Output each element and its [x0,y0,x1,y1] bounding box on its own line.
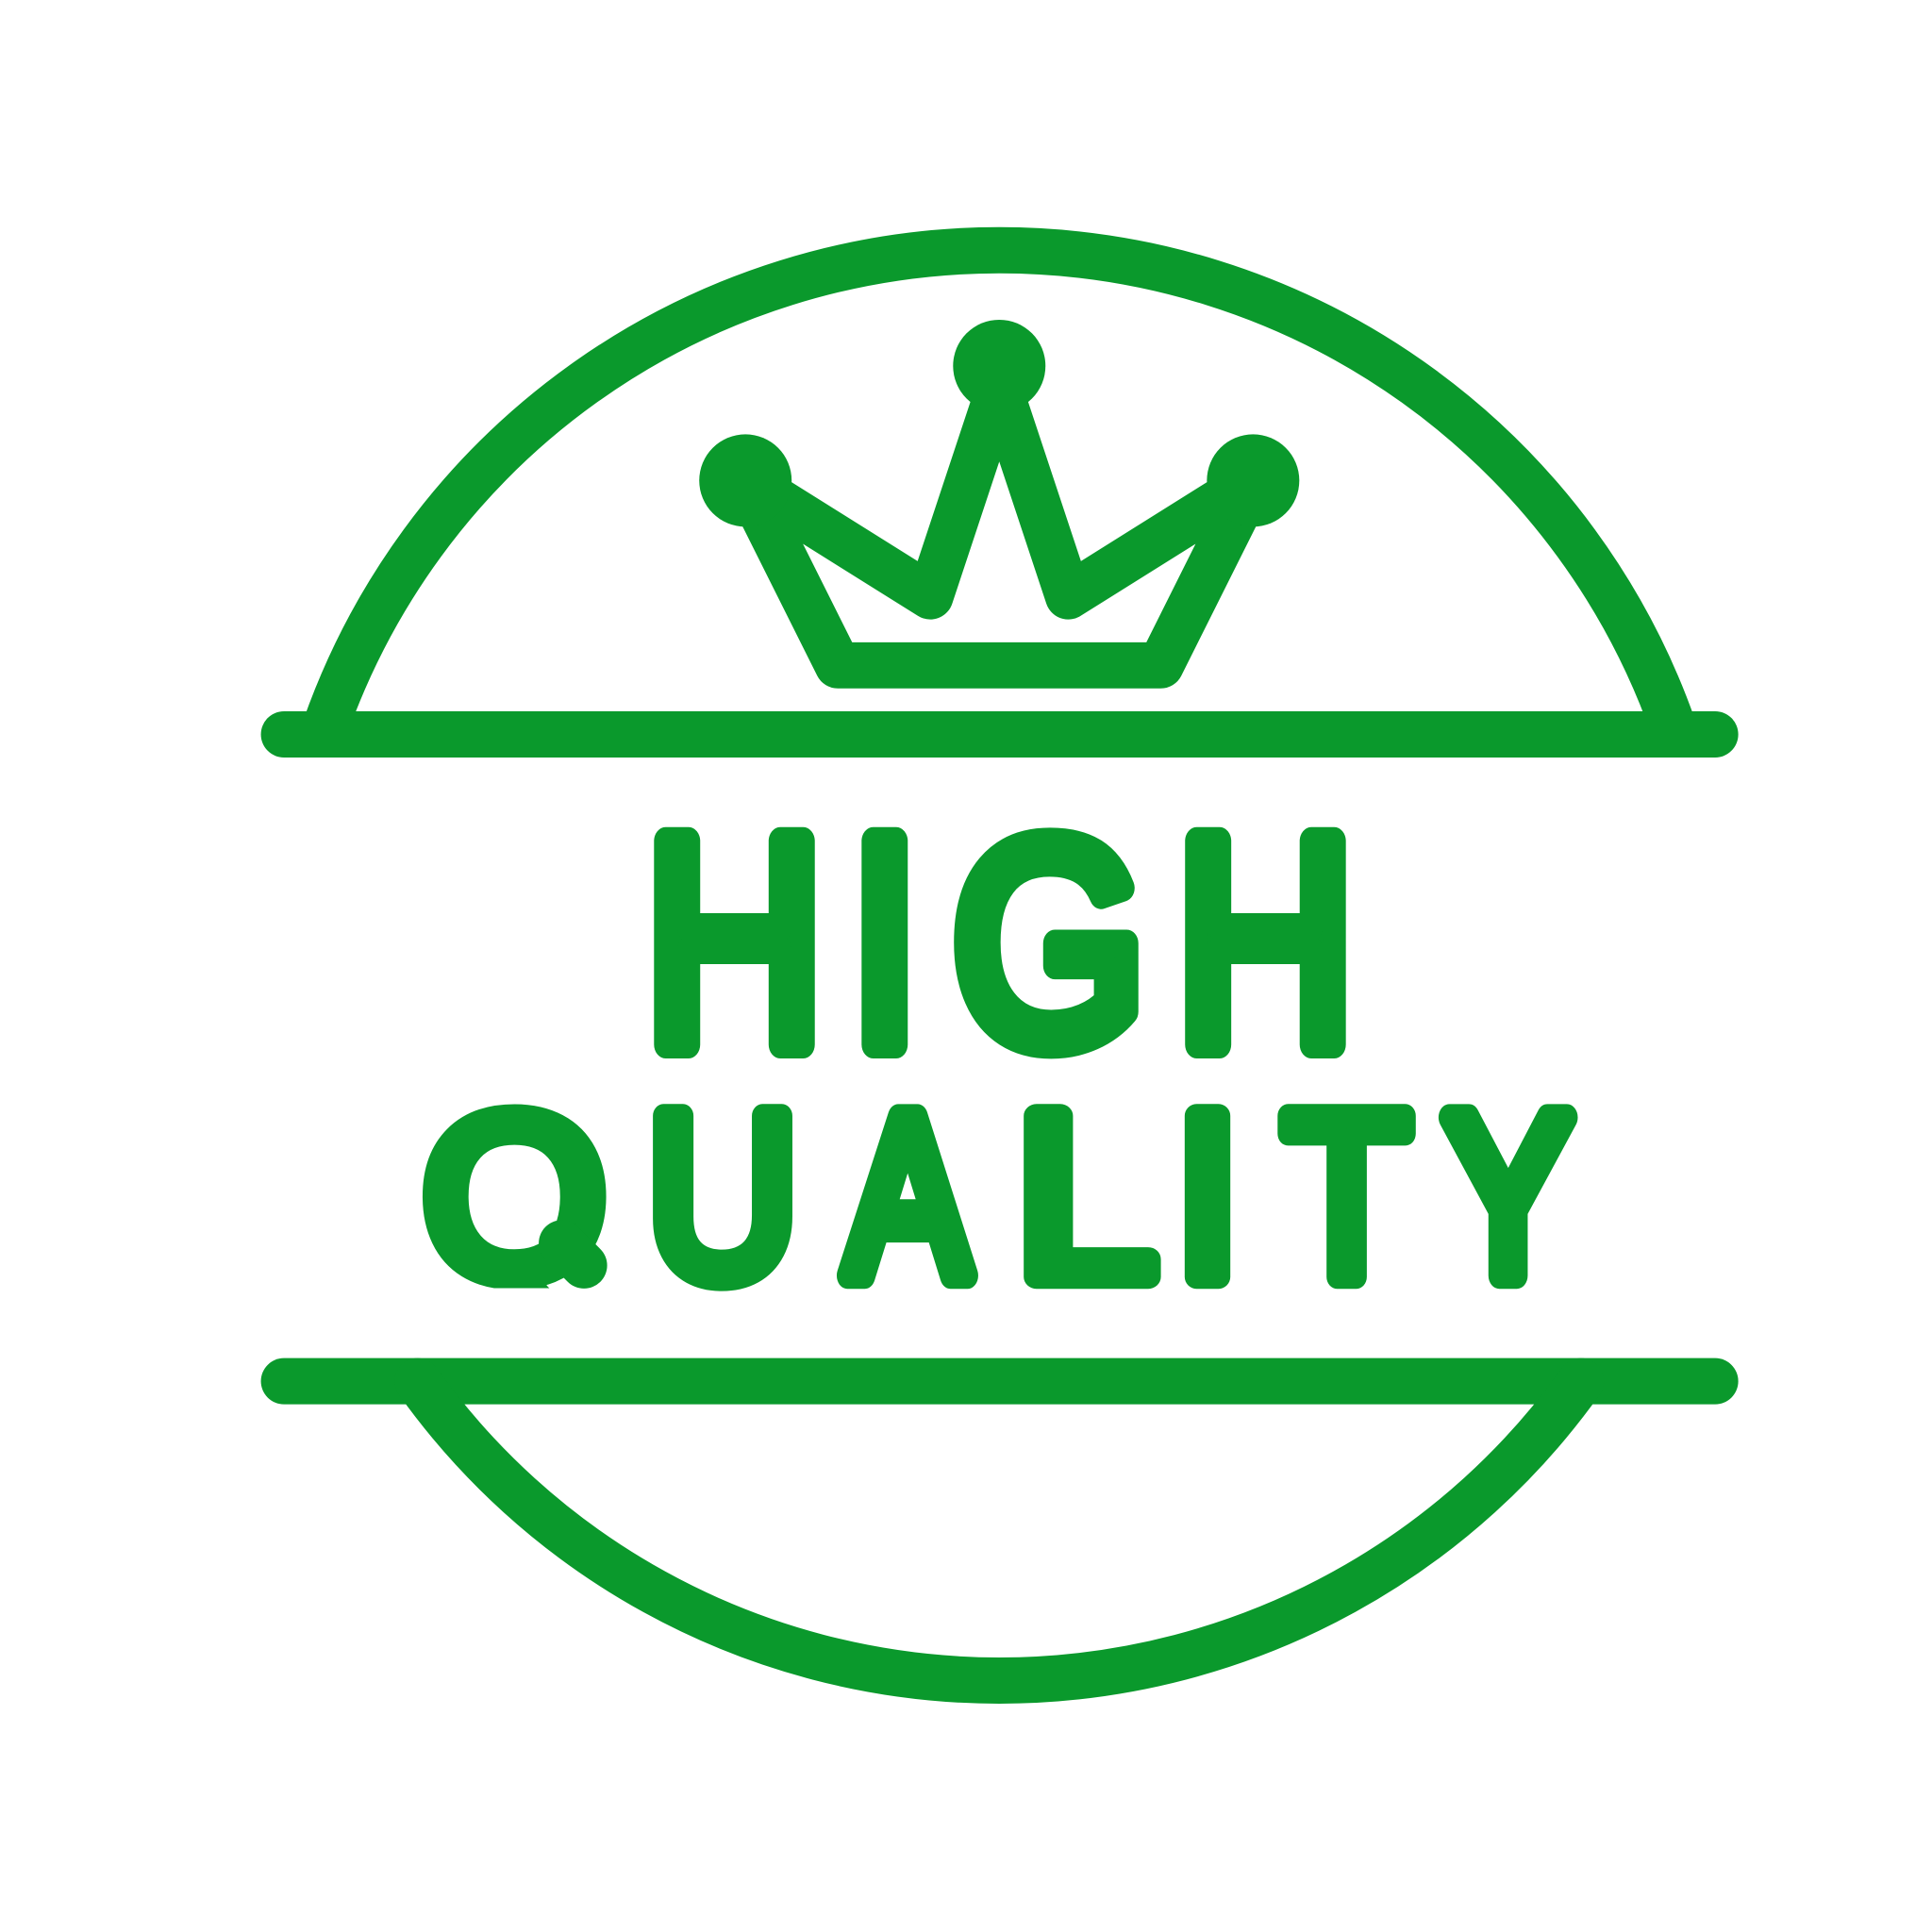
heading: QUALITY: T [1284,1065,1410,1327]
heading: QUALITY: Q [424,1070,606,1325]
heading: QUALITY: I [1175,1065,1240,1327]
heading: HIGH: I [851,778,919,1108]
bottom arc [418,1381,1581,1680]
heading: HIGH: G [953,783,1145,1104]
badge emblem [260,226,1739,1704]
heading: QUALITY: L [1016,1065,1157,1326]
heading: HIGH: H [645,778,824,1108]
heading: QUALITY: A [847,1067,969,1324]
heading: QUALITY: U [647,1065,798,1326]
upper horizontal rule [284,717,1715,752]
top arc [323,250,1675,734]
heading: HIGH [645,778,1355,1108]
heading: QUALITY: Y [1445,1068,1571,1325]
icon: crown [699,320,1299,665]
heading: HIGH: H [1176,778,1355,1108]
heading: QUALITY [423,1104,1577,1291]
lower horizontal rule [284,1363,1715,1399]
